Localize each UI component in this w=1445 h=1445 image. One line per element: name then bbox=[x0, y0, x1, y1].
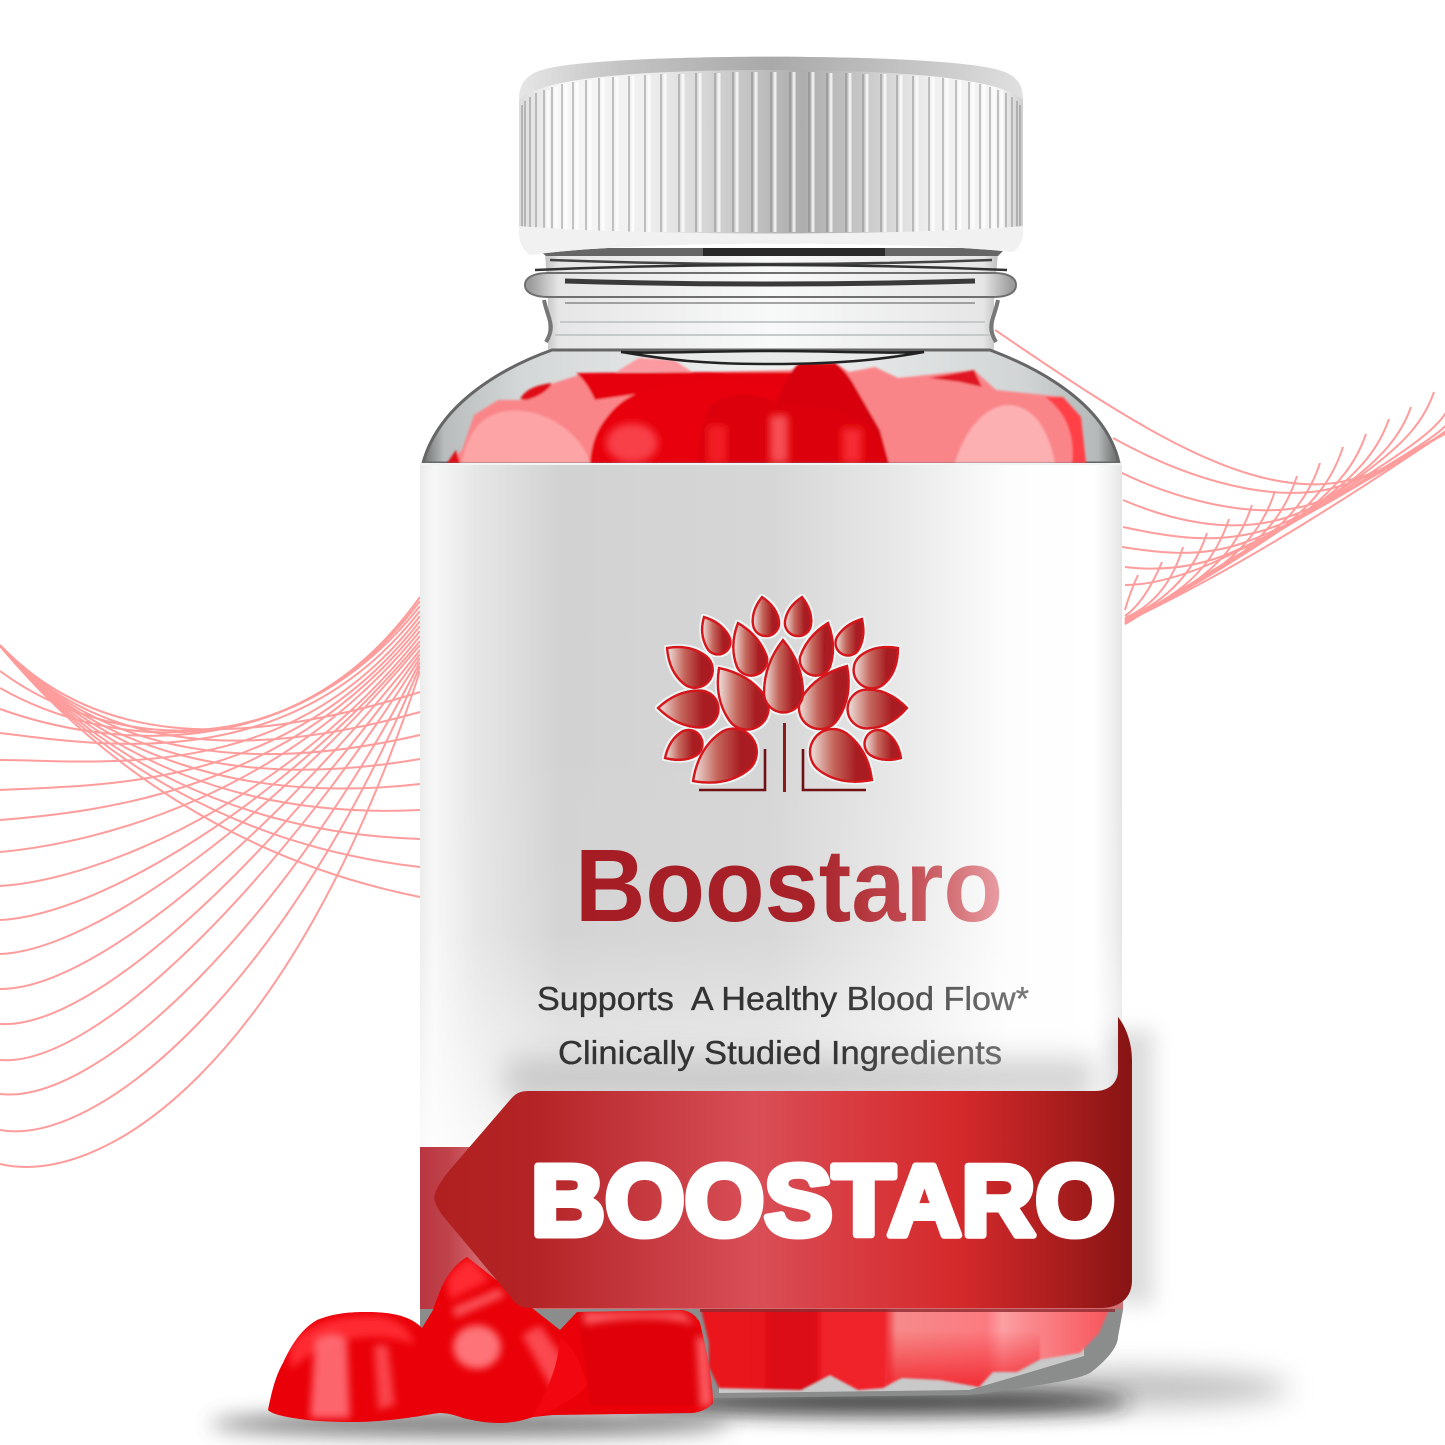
red gummy top band bbox=[576, 372, 795, 400]
gummy pink tab bbox=[616, 358, 692, 372]
banner bbox=[434, 1017, 1132, 1308]
jar base bbox=[420, 1290, 1123, 1398]
left gummy top sheen bbox=[290, 1316, 415, 1370]
cap top rim bbox=[519, 57, 1023, 100]
gummies group behind banner bbox=[268, 1257, 713, 1423]
cap bbox=[519, 57, 1023, 255]
gummies visible above label bbox=[447, 358, 1086, 463]
cap ribs bbox=[522, 72, 1020, 232]
bottle bbox=[420, 57, 1123, 1398]
jar base inner light bbox=[719, 1330, 1084, 1393]
tagline line one: Supports A Healthy Blood Flow* bbox=[537, 980, 1029, 1017]
red label strip bbox=[420, 1147, 1123, 1309]
banner contact shadow on label bbox=[505, 1058, 1095, 1100]
gummy base mass bbox=[447, 362, 1086, 463]
red gummy left bbox=[589, 382, 783, 463]
left wave line pattern bbox=[0, 597, 420, 1167]
left lighter gummy bbox=[462, 411, 590, 463]
banner shape bbox=[434, 1017, 1132, 1308]
right gummies bbox=[955, 405, 1055, 463]
gummies inside jar base bbox=[700, 1305, 1110, 1390]
right gummy shading bbox=[577, 1312, 713, 1405]
logo: leaf tree bbox=[658, 597, 907, 792]
tagline line two: Clinically Studied Ingredients bbox=[558, 1034, 1002, 1071]
middle gummy highlights bbox=[453, 1325, 501, 1369]
right dark gummy tip bbox=[929, 370, 982, 387]
glass shoulder bbox=[423, 350, 1119, 463]
bottle neck bbox=[525, 248, 1016, 350]
left gummy highlight strip bbox=[310, 1334, 350, 1418]
label bbox=[420, 463, 1123, 1309]
cap lower band bbox=[519, 226, 1023, 255]
red gummy peak bbox=[777, 363, 889, 463]
right wave line pattern bbox=[995, 330, 1445, 624]
center gummy bbox=[698, 396, 866, 462]
neck dark arc bbox=[621, 351, 924, 364]
banner shadow bbox=[1112, 1030, 1154, 1305]
shadow under banner bbox=[700, 1309, 1115, 1312]
brand name: Boostaro bbox=[575, 828, 1003, 943]
ground shadow bbox=[210, 1370, 1290, 1436]
banner title: BOOSTARO bbox=[531, 1145, 1115, 1257]
